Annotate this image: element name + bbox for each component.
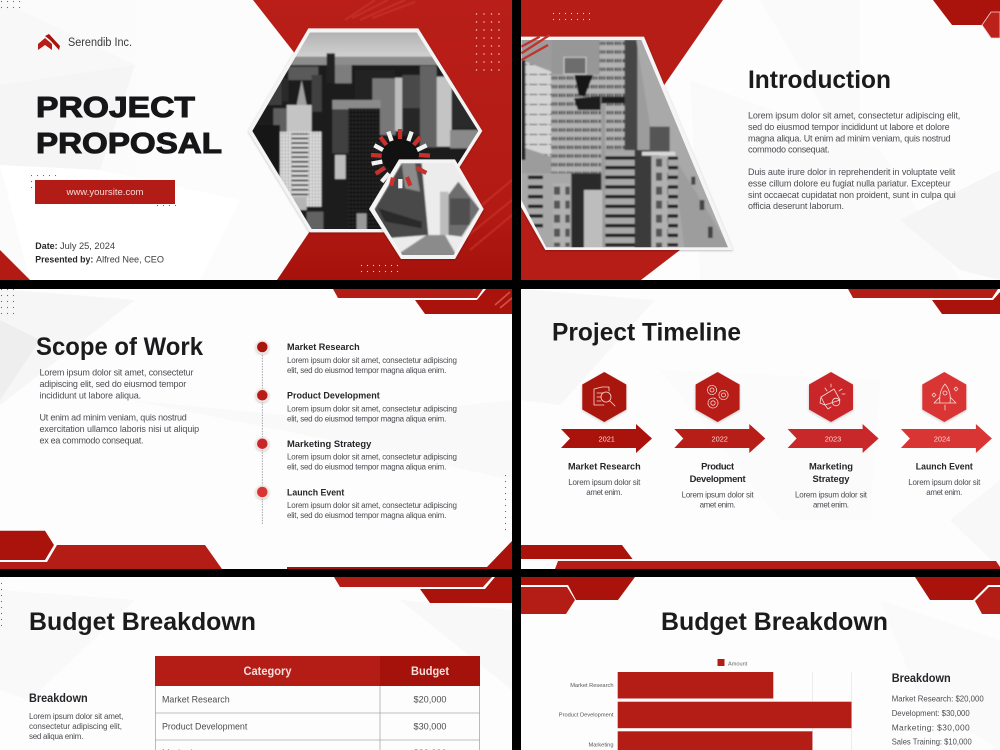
breakdown side note: Lorem ipsum dolor sit amet, (29, 712, 123, 721)
step description (568, 478, 641, 497)
step description (795, 490, 868, 509)
bottom left corner triangle (0, 250, 30, 280)
title: PROJECT (36, 92, 195, 124)
item: marketing strategy: Marketing Strategy (287, 438, 372, 449)
title: PROPOSAL (36, 128, 222, 160)
body text: officia deserunt laborum. (748, 201, 844, 211)
item: market research: elit, sed do eiusmod tempor magna aliqua enim. (287, 366, 446, 375)
top right corner shapes (334, 577, 512, 603)
budget table: Product Development (162, 720, 248, 732)
city photo hexagon (245, 25, 485, 259)
item: marketing strategy (287, 438, 457, 472)
step 2024: 2024 (934, 434, 950, 444)
heading: Scope of Work (36, 333, 203, 361)
breakdown side note: sed aliqua enim. (29, 732, 83, 741)
panel: budget chart slide (521, 577, 1000, 750)
body text: Duis aute irure dolor in reprehenderit in voluptate velit (748, 167, 956, 177)
budget table: Market Research (162, 694, 230, 704)
dot grid top left (0, 0, 20, 8)
item: product development (287, 390, 457, 423)
budget table: Category (244, 666, 292, 678)
red background shape (521, 0, 723, 280)
step title: Marketing (809, 460, 853, 472)
company name: Serendib Inc. (68, 37, 132, 49)
budget table: $30,000 (414, 720, 446, 732)
body text: esse cillum dolore eu fugiat nulla pariatur. Excepteur (748, 178, 951, 188)
step title: Market Research (568, 460, 641, 472)
item: market research (287, 341, 457, 375)
step description: amet enim. (586, 488, 622, 497)
breakdown list: Market Research: $20,000 (892, 694, 984, 704)
panel: project timeline slide (521, 289, 1000, 569)
breakdown side note: Breakdown (29, 693, 88, 705)
item: product development: elit, sed do eiusmod tempor magna aliqua enim. (287, 414, 446, 423)
panel: title slide (0, 0, 512, 280)
horizontal bar chart: Market Research (570, 683, 614, 689)
horizontal bar chart: Marketing (589, 742, 614, 748)
step 2022 (674, 372, 765, 509)
breakdown list: Breakdown (892, 673, 951, 685)
step description (682, 490, 754, 509)
street photo hexagon (369, 159, 484, 259)
hexagon icon: document search (582, 372, 626, 422)
step 2022: 2022 (711, 434, 728, 444)
body text: commodo consequat. (748, 145, 830, 155)
step 2024 (901, 372, 992, 497)
step description: Lorem ipsum dolor sit (908, 478, 981, 487)
red scribble (521, 35, 550, 60)
dot grid top right (476, 13, 500, 71)
step description: amet enim. (700, 500, 736, 509)
heading: Budget Breakdown (29, 608, 256, 636)
building photo (518, 35, 738, 250)
heading: Introduction (748, 66, 891, 94)
logo (38, 34, 60, 50)
intro text: Ut enim ad minim veniam, quis nostrud (40, 412, 187, 422)
arrow 2022 (674, 424, 765, 453)
dot rows bottom (360, 264, 398, 272)
step description (908, 478, 981, 497)
dot rows (552, 12, 590, 20)
budget table: $20,000 (414, 694, 446, 704)
date and presenter: Alfred Nee, CEO (96, 254, 164, 264)
intro text: Lorem ipsum dolor sit amet, consectetur (40, 368, 194, 378)
arrow 2024 (901, 424, 992, 453)
red background shape (253, 0, 512, 280)
chart legend (718, 659, 748, 668)
step description: amet enim. (926, 488, 962, 497)
step title: Launch Event (916, 460, 973, 472)
button dot accents (29, 175, 180, 208)
website button: www.yoursite.com (66, 187, 144, 198)
breakdown side note (29, 693, 123, 741)
radial burst ornament (371, 129, 430, 182)
intro text: ex ea commodo consequat. (40, 435, 144, 445)
arrow 2023 (788, 424, 879, 453)
panel: introduction slide (518, 0, 1000, 280)
step 2021 (561, 372, 652, 497)
item: product development: Product Development (287, 390, 380, 400)
item: launch event (287, 486, 457, 520)
item: market research: Lorem ipsum dolor sit amet, consectetur adipiscing (287, 356, 457, 365)
intro text: adipiscing elit, sed do eiusmod tempor (40, 379, 186, 389)
breakdown list: Marketing: $30,000 (892, 722, 970, 732)
breakdown list (892, 673, 984, 746)
heading: Project Timeline (552, 318, 741, 346)
heading: Budget Breakdown (661, 608, 888, 636)
top right corner hexagons (933, 0, 1000, 38)
intro text: incididunt ut labore aliqua. (40, 390, 141, 400)
date and presenter (36, 242, 164, 264)
top right corner shapes (333, 289, 512, 314)
step description: Lorem ipsum dolor sit (795, 490, 868, 499)
step title: Product (701, 460, 734, 472)
top left corner hexagons (521, 577, 635, 614)
panel: scope of work slide (0, 289, 512, 569)
vertical timeline (256, 341, 268, 525)
budget table: Budget (411, 666, 449, 678)
top right corner hexagons (915, 577, 1000, 614)
horizontal bar chart: Product Development (559, 712, 614, 718)
dot column right (505, 475, 511, 533)
step title: Development (690, 473, 746, 484)
body text: sed do eiusmod tempor incididunt ut labore et dolore (748, 122, 950, 132)
scribble accents (345, 0, 512, 250)
bottom shapes (521, 545, 1000, 569)
arrow 2021 (561, 424, 652, 453)
hexagon icon: rocket (922, 372, 966, 422)
step title (809, 460, 853, 484)
budget table (155, 656, 480, 750)
website button (35, 180, 175, 204)
panel: budget table slide (0, 577, 512, 750)
bottom right shapes (287, 541, 512, 569)
body text: magna aliqua. Ut enim ad minim veniam, quis nostrud (748, 133, 951, 143)
step title: Strategy (812, 473, 850, 484)
breakdown list: Sales Training: $10,000 (892, 736, 972, 746)
step description: Lorem ipsum dolor sit (682, 490, 754, 499)
item: launch event: Lorem ipsum dolor sit amet, consectetur adipiscing (287, 501, 457, 510)
intro text: exercitation ullamco laboris nisi ut aliquip (40, 424, 199, 434)
hexagon icon: gears (696, 372, 740, 422)
breakdown list: Development: $30,000 (892, 708, 970, 718)
item: marketing strategy: elit, sed do eiusmod tempor magna aliqua enim. (287, 463, 446, 472)
date and presenter: Presented by: (35, 254, 93, 264)
body text: sint occaecat cupidatat non proident, sunt in culpa qui (748, 190, 956, 200)
date and presenter: July 25, 2024 (60, 240, 115, 251)
horizontal bar chart (559, 672, 852, 750)
step 2021: 2021 (598, 434, 615, 444)
step description: amet enim. (813, 500, 849, 509)
body text (748, 110, 960, 211)
step title (690, 460, 746, 484)
step description: Lorem ipsum dolor sit (568, 478, 641, 487)
chart legend: Amount (728, 662, 748, 668)
bottom left shapes (0, 531, 222, 569)
item: product development: Lorem ipsum dolor sit amet, consectetur adipiscing (287, 404, 457, 413)
item: marketing strategy: Lorem ipsum dolor sit amet, consectetur adipiscing (287, 453, 457, 462)
step 2023: 2023 (825, 434, 841, 444)
breakdown side note: consectetur adipiscing elit, (29, 722, 122, 731)
item: launch event: elit, sed do eiusmod tempor magna aliqua enim. (287, 511, 446, 520)
hexagon icon: megaphone (809, 372, 853, 422)
title (38, 96, 222, 154)
dot grid top left (0, 289, 14, 319)
step 2023 (788, 372, 879, 509)
intro text (40, 368, 199, 445)
item: market research: Market Research (287, 341, 360, 352)
dot column left (0, 580, 4, 630)
top right corner shapes (848, 289, 1000, 314)
item: launch event: Launch Event (287, 486, 344, 497)
body text: Lorem ipsum dolor sit amet, consectetur adipiscing elit, (748, 110, 960, 120)
date and presenter: Date: (35, 240, 58, 251)
